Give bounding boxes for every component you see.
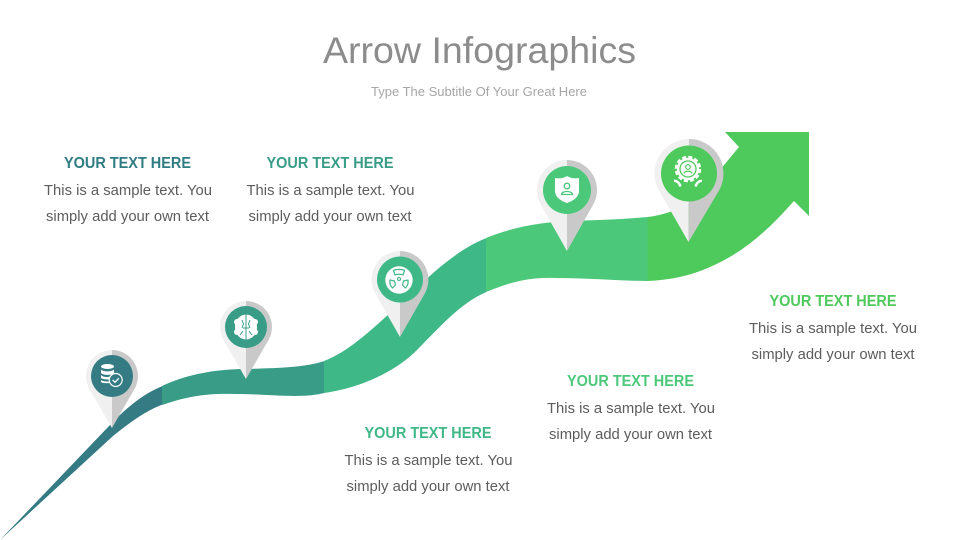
text block 1: simply add your own text xyxy=(46,208,210,225)
text block 5: YOUR TEXT HERE xyxy=(770,293,897,310)
text block 5: This is a sample text. You xyxy=(749,320,917,337)
ribbon segment 5 with arrow head xyxy=(648,132,809,281)
text block 2: YOUR TEXT HERE xyxy=(266,155,394,172)
icon: radiation symbol xyxy=(385,266,413,294)
text block 1: This is a sample text. You xyxy=(44,182,212,199)
icon: shield with person xyxy=(555,176,579,203)
text block 3 xyxy=(344,425,512,495)
ribbon segment 3 xyxy=(324,238,486,393)
ribbon segment 4 xyxy=(486,217,648,292)
text block 4: This is a sample text. You xyxy=(547,400,715,417)
title: Arrow Infographics xyxy=(323,30,636,71)
text block 5: simply add your own text xyxy=(752,346,915,363)
pin 5: award badge xyxy=(654,139,724,242)
text block 1 xyxy=(44,155,212,225)
text block 2: This is a sample text. You xyxy=(246,182,414,199)
text block 3: simply add your own text xyxy=(346,478,510,495)
pin 3: radiation xyxy=(372,251,428,337)
ribbon segment 1 xyxy=(0,386,162,540)
pin 1: database check xyxy=(86,350,138,428)
text block 3: This is a sample text. You xyxy=(344,452,512,469)
icon: award rosette xyxy=(674,157,702,186)
text block 2 xyxy=(246,155,414,225)
text block 4: YOUR TEXT HERE xyxy=(567,373,694,390)
text block 3: YOUR TEXT HERE xyxy=(364,425,492,442)
icon: database with check xyxy=(101,364,122,386)
text block 4: simply add your own text xyxy=(549,426,713,443)
pin 4: shield xyxy=(537,160,597,251)
icon: brain xyxy=(234,314,258,340)
text block 2: simply add your own text xyxy=(248,208,412,225)
subtitle: Type The Subtitle Of Your Great Here xyxy=(371,85,587,99)
text block 4 xyxy=(547,373,715,443)
pin 2: brain xyxy=(220,301,272,379)
ribbon segment 2 xyxy=(162,361,324,405)
text block 5 xyxy=(749,293,917,363)
arrow ribbon xyxy=(0,132,809,540)
text block 1: YOUR TEXT HERE xyxy=(64,155,191,172)
